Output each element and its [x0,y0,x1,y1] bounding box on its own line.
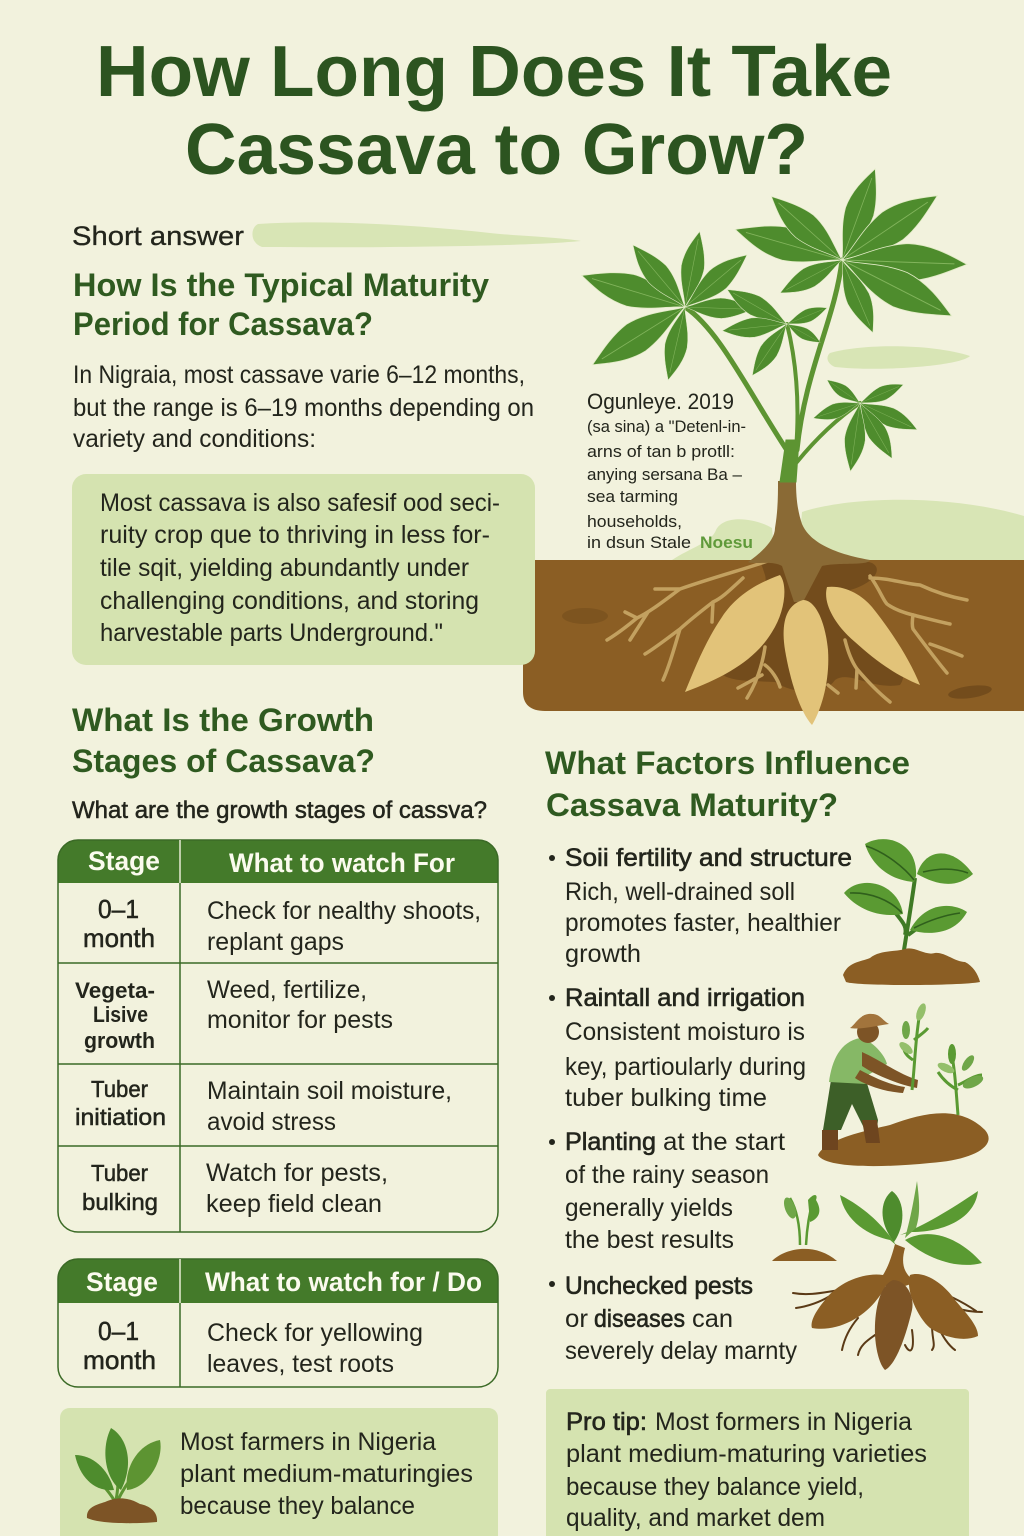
factor: planting time [549,1128,785,1254]
row: vegetative growth [75,976,393,1053]
row: vegetative growth: Vegeta- [75,978,155,1003]
factor: planting time: the best results [565,1226,734,1254]
factor: pests: or [565,1305,588,1333]
row: tuber bulking: keep field clean [206,1190,382,1218]
table header: Stage [86,1267,158,1297]
row: 0-1 month: 0–1 [98,894,139,924]
row: 0-1 month: leaves, test roots [207,1350,394,1378]
factor: soil fertility: Soii fertility and structure [565,844,852,872]
growth stages heading: What Is the Growth [72,702,374,738]
tubers [685,575,920,725]
dark root shading [562,558,993,701]
row: 0-1 month: Check for yellowing [207,1319,423,1347]
table header [86,1267,482,1297]
panel: farmers note: Most farmers in Nigeria [180,1428,436,1456]
row: tuber bulking: bulking [82,1189,158,1215]
citation: Ogunleye. 2019 [587,389,734,414]
citation: Noesu [700,533,753,552]
row: vegetative growth: Weed, fertilize, [207,976,367,1004]
row: tuber initiation [75,1076,452,1136]
panel: farmers note: because they balance [180,1492,415,1520]
table header: Stage [88,846,160,876]
panel: food security callout: tile sqit, yielding abundantly under [100,554,469,582]
panel: farmers note: plant medium-maturingies [180,1460,473,1488]
factor: rainfall: key, partioularly during [565,1053,806,1081]
intro paragraph: variety and conditions: [73,425,316,453]
row: tuber bulking: Tuber [91,1160,148,1186]
leaf clusters [577,164,968,473]
factor: planting time: at the start [663,1128,785,1156]
green stems [685,260,860,482]
factor: pests: Unchecked pests [565,1272,753,1300]
table header [88,846,455,878]
row: tuber bulking [82,1159,388,1218]
short answer label with brush stroke [72,221,581,251]
trunk [748,481,870,602]
row: vegetative growth: Lisive [93,1002,148,1027]
factor: soil fertility [549,844,852,968]
row: tuber initiation: Tuber [91,1076,148,1102]
maturity heading: How Is the Typical Maturity [73,267,489,303]
factors heading [545,745,910,823]
growth stages heading [72,702,375,779]
growth stages question: What are the growth stages of cassva? [72,797,487,824]
row: vegetative growth: monitor for pests [207,1006,393,1034]
table header: What to watch for / Do [205,1267,482,1297]
icon: young plant on soil [843,839,980,985]
icon: seedling [75,1428,161,1523]
factor: pests: can [692,1305,733,1333]
row: tuber initiation: avoid stress [207,1108,336,1136]
row: tuber bulking: Watch for pests, [206,1159,388,1187]
factor: pests [549,1272,797,1365]
panel: pro tip: Pro tip: [566,1408,647,1436]
row: 0-1 month [83,1316,423,1378]
factor: rainfall: Consistent moisturo is [565,1018,805,1046]
citation: households, [587,512,682,531]
title [96,32,892,190]
table header: What to watch For [229,848,455,878]
table: stages 2 [58,1259,498,1387]
row: 0-1 month: Check for nealthy shoots, [207,897,481,925]
panel: food security callout: ruity crop que to thriving in less for- [100,521,490,549]
panel: pro tip: quality, and market dem [566,1504,825,1532]
panel: farmers note [60,1408,498,1536]
intro paragraph: but the range is 6–19 months depending on [73,394,534,422]
icon: farmer planting [818,1002,989,1166]
roots [607,558,967,702]
panel: food security callout [72,474,535,665]
illustration: cassava plant with roots and soil [523,164,1024,725]
citation: arns of tan b protll: [587,442,735,461]
factors heading: What Factors Influence [545,745,910,781]
citation [587,389,753,552]
panel: pro tip [546,1389,969,1536]
row: tuber initiation: initiation [75,1104,166,1130]
maturity heading [73,267,489,342]
row: 0-1 month: 0–1 [98,1316,139,1346]
factor: pests: severely delay marnty [565,1337,797,1365]
row: tuber initiation: Maintain soil moisture, [207,1077,452,1105]
factor: rainfall [549,984,806,1112]
citation: anying sersana Ba – [587,465,743,484]
maturity heading: Period for Cassava? [73,306,373,342]
panel: food security callout: harvestable parts Underground." [100,619,443,647]
citation: sea tarming [587,487,678,506]
panel: food security callout: challenging conditions, and storing [100,587,479,615]
row: 0-1 month: month [83,1345,156,1375]
factor: soil fertility: Rich, well-drained soll [565,878,795,906]
panel: food security callout: Most cassava is also safesif ood seci- [100,489,500,517]
factor: soil fertility: promotes faster, healthier [565,909,841,937]
factor: planting time: generally yields [565,1194,733,1222]
background hills and cloud [672,346,1024,560]
table: stages 1 [58,840,498,1232]
icon: harvested cassava tubers [793,1181,982,1370]
title: How Long Does It Take [96,32,892,112]
intro paragraph: In Nigraia, most cassave varie 6–12 months, [73,361,525,389]
soil block [523,560,1024,711]
short answer label with brush stroke: Short answer [72,221,244,251]
citation: (sa sina) a "Detenl-in- [587,417,746,436]
growth stages heading: Stages of Cassava? [72,743,375,779]
row: 0-1 month: replant gaps [207,928,344,956]
title: Cassava to Grow? [185,110,808,190]
factor: rainfall: tuber bulking time [565,1084,767,1112]
factors heading: Cassava Maturity? [546,787,838,823]
panel: pro tip: because they balance yield, [566,1473,864,1501]
factor: planting time: of the rainy season [565,1161,769,1189]
row: vegetative growth: growth [84,1028,155,1053]
intro paragraph [73,361,534,453]
row: 0-1 month [83,894,481,956]
citation: in dsun Stale [587,533,691,552]
icon: small seedling on mound [772,1195,837,1261]
factor: planting time: Planting [565,1128,656,1156]
row: 0-1 month: month [83,923,155,953]
panel: pro tip: plant medium-maturing varieties [566,1440,927,1468]
factor: soil fertility: growth [565,940,641,968]
panel: pro tip: Most formers in Nigeria [655,1408,912,1436]
factor: pests: diseases [594,1305,685,1333]
factor: rainfall: Raintall and irrigation [565,984,805,1012]
